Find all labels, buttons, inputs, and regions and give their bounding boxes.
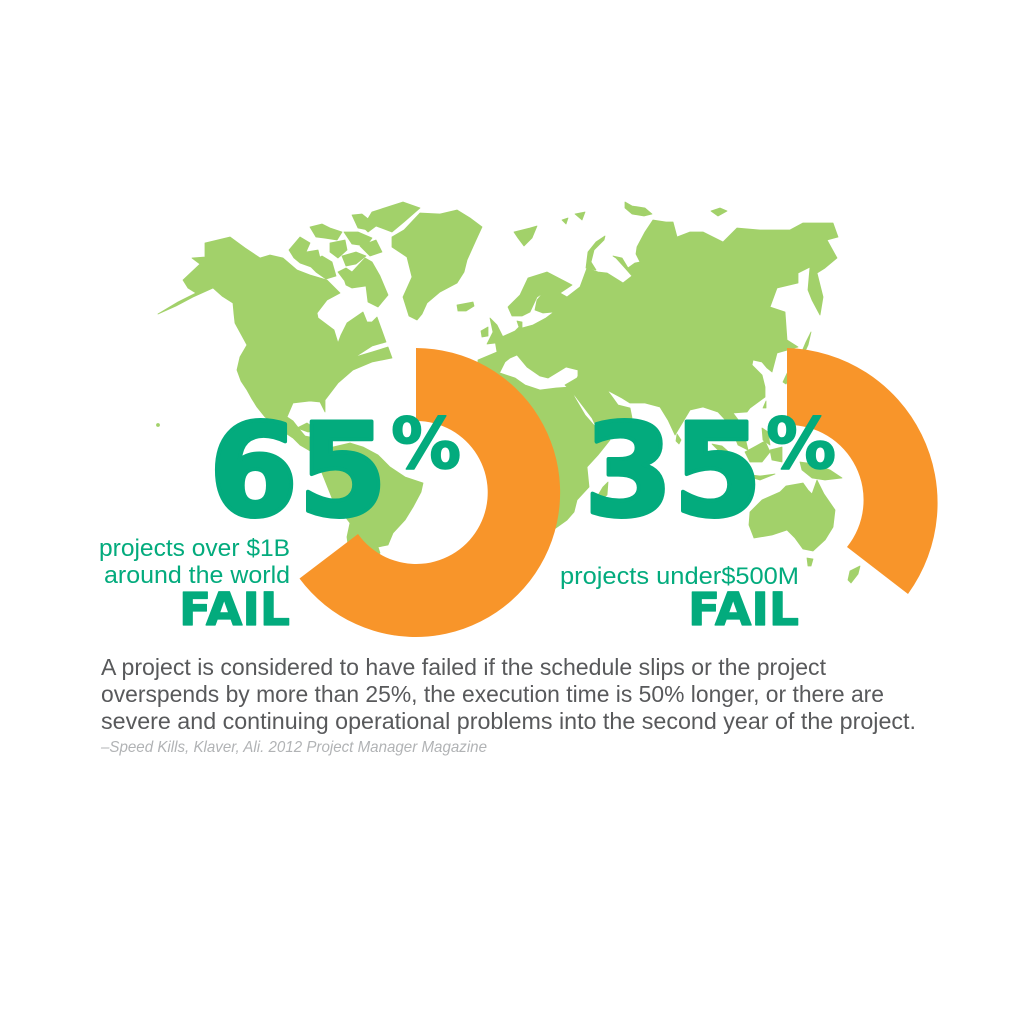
- percent sign: %: [391, 403, 461, 485]
- percent sign: %: [766, 403, 836, 485]
- eurasia: [478, 220, 838, 450]
- novaya zemlya: [586, 236, 605, 270]
- number 35: 35: [584, 397, 762, 546]
- sri lanka: [676, 434, 681, 444]
- 35 percent figure: [584, 397, 836, 546]
- fail word: FAIL: [688, 583, 799, 636]
- number 65: 65: [209, 397, 387, 546]
- madagascar: [597, 482, 608, 499]
- line 1: projects over $1B: [99, 535, 290, 562]
- greenland: [392, 210, 482, 320]
- tasmania: [807, 558, 813, 566]
- northern arctic islands: [562, 202, 727, 224]
- line 1: projects under$500M: [560, 563, 799, 590]
- svalbard: [514, 226, 537, 246]
- south america: [322, 443, 423, 562]
- australia: [749, 480, 835, 551]
- uk and ireland: [481, 318, 503, 344]
- label: projects under 500M fail: [560, 563, 799, 636]
- new zealand: [848, 566, 860, 583]
- japan: [783, 332, 811, 384]
- 65 percent figure: [209, 397, 461, 546]
- cuba: [297, 423, 318, 432]
- line 3: severe and continuing operational problems into the second year of the project.: [101, 708, 916, 734]
- label: projects over 1B fail: [99, 535, 290, 636]
- definition paragraph: [101, 654, 916, 734]
- fail word: FAIL: [179, 583, 290, 636]
- taiwan and philippines: [762, 401, 770, 445]
- indonesia and new guinea: [712, 441, 842, 480]
- world map: [156, 202, 860, 583]
- donut segment: 65 percent: [300, 348, 560, 637]
- north america: [158, 237, 392, 452]
- line 2: around the world: [104, 562, 290, 589]
- line 2: overspends by more than 25%, the execution time is 50% longer, or there are: [101, 681, 884, 707]
- donut segment: 35 percent: [787, 348, 938, 594]
- africa: [490, 372, 610, 540]
- hawaii: [156, 424, 160, 426]
- citation: –Speed Kills, Klaver, Ali. 2012 Project Manager Magazine: [100, 739, 487, 756]
- canadian arctic islands: [289, 202, 420, 307]
- iceland: [457, 302, 474, 311]
- line 1: A project is considered to have failed if the schedule slips or the project: [101, 654, 827, 680]
